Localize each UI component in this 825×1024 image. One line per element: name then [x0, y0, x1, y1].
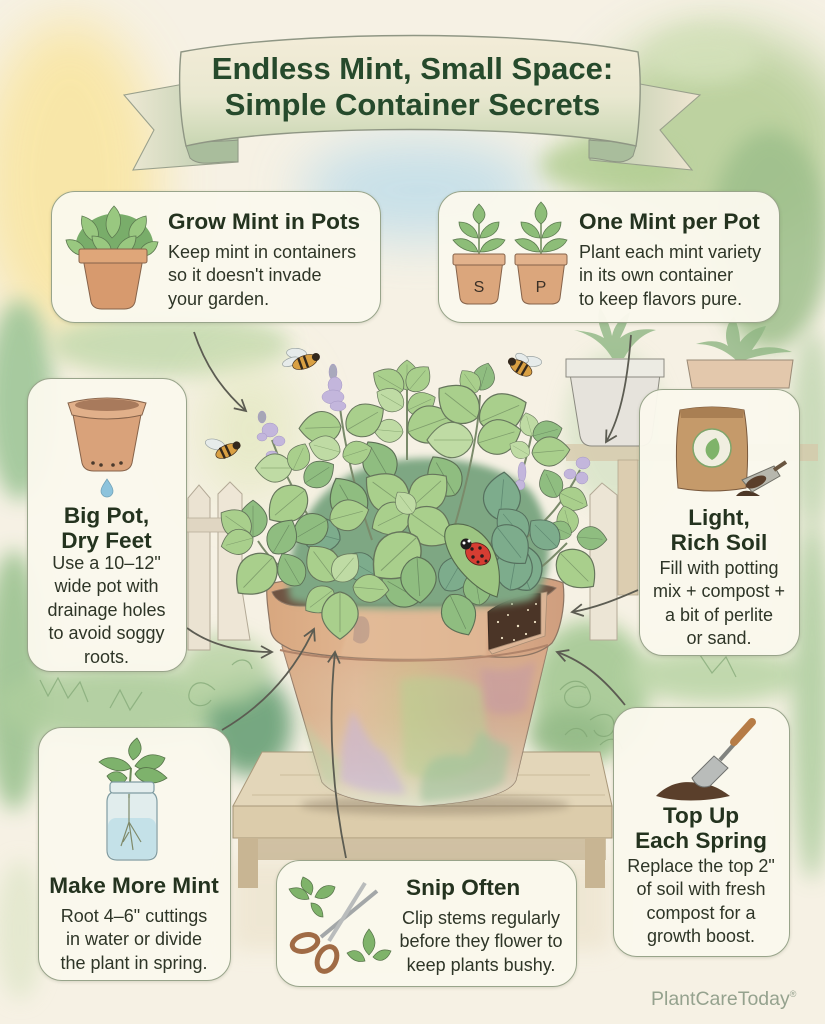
text: Plant each mint variety: [579, 242, 761, 262]
text: Keep mint in containers: [168, 242, 356, 262]
watermark: ®: [790, 989, 797, 999]
title: Simple Container Secrets: [225, 87, 600, 122]
heading: [635, 803, 767, 853]
heading: Rich Soil: [671, 530, 767, 555]
text: or sand.: [686, 628, 752, 648]
text: in its own container: [579, 265, 733, 285]
watermark: PlantCareToday: [651, 988, 790, 1010]
icon: two labelled pots: P: [536, 279, 546, 296]
stems: [258, 365, 580, 580]
text: the plant in spring.: [60, 953, 208, 973]
text: [399, 908, 563, 975]
panel: grow mint in pots: [51, 191, 381, 323]
text: [47, 553, 166, 667]
icon: trowel with soil: [656, 718, 756, 800]
title: [212, 51, 613, 122]
title ribbon: [124, 36, 700, 170]
bees: [201, 338, 546, 464]
text: of soil with fresh: [636, 879, 766, 899]
ladybird leaf: [445, 524, 499, 597]
heading: Grow Mint in Pots: [168, 209, 360, 234]
heading: Dry Feet: [61, 528, 152, 553]
text: Clip stems regularly: [402, 908, 560, 928]
text: [653, 558, 785, 648]
arrows: [187, 332, 638, 858]
front-left cluster: [352, 573, 390, 604]
ladybird: [460, 538, 495, 570]
wooden table: [233, 752, 612, 888]
text: to keep flavors pure.: [579, 289, 742, 309]
panel: light, rich soil: [639, 389, 800, 656]
wooden fence: [186, 482, 617, 650]
text: wide pot with: [54, 576, 159, 596]
right ribbon tail: [590, 84, 700, 170]
text: growth boost.: [647, 926, 755, 946]
text: keep plants bushy.: [407, 955, 555, 975]
pot rim: [267, 573, 564, 659]
panel: big pot, dry feet: [27, 378, 187, 672]
text: [579, 242, 762, 309]
text: in water or divide: [66, 929, 202, 949]
panel: top up each spring: [613, 707, 790, 957]
text: [60, 906, 208, 973]
text: a bit of perlite: [665, 605, 773, 625]
centre cluster: [355, 462, 418, 523]
text: Root 4–6" cuttings: [61, 906, 207, 926]
icon: scissors and sprigs: [288, 876, 392, 974]
heading: Light,: [688, 505, 750, 530]
top sprig leaves: [395, 360, 419, 390]
text: [627, 856, 775, 946]
far-left sprig: [239, 500, 267, 537]
text: so it doesn't invade: [168, 265, 322, 285]
text: to avoid soggy: [48, 623, 165, 643]
pot body: [282, 646, 548, 806]
heading: Snip Often: [406, 875, 520, 900]
text: roots.: [84, 647, 129, 667]
left ribbon tail: [124, 84, 238, 170]
mint plant: [213, 360, 608, 642]
flower spikes: [257, 364, 590, 490]
text: before they flower to: [399, 931, 563, 951]
plant backing: [288, 458, 549, 609]
text: Fill with potting: [659, 558, 779, 578]
heading: Each Spring: [635, 828, 767, 853]
heading: Make More Mint: [49, 873, 219, 898]
panel: snip often: [276, 860, 577, 987]
icon: pot with drainage holes: [67, 398, 147, 498]
heading: Top Up: [663, 803, 739, 828]
right sprig leaves: [470, 360, 498, 393]
icon: two labelled pots: [452, 202, 568, 304]
soil cutaway: [488, 592, 547, 654]
text: compost for a: [646, 903, 756, 923]
heading: One Mint per Pot: [579, 209, 760, 234]
heading: [61, 503, 152, 553]
background foliage strokes: [40, 655, 736, 749]
text: [168, 242, 356, 309]
text: Replace the top 2": [627, 856, 775, 876]
far-right sprig: [534, 465, 567, 502]
text: Use a 10–12": [52, 553, 161, 573]
panel: make more mint: [38, 727, 231, 981]
heading: Big Pot,: [64, 503, 149, 528]
panel: one mint per pot: [438, 191, 780, 323]
title: Endless Mint, Small Space:: [212, 51, 613, 86]
icon: jar with cutting: [98, 738, 168, 861]
small background pots: [566, 308, 793, 446]
text: mix + compost +: [653, 581, 785, 601]
wooden side table, right: [566, 444, 818, 595]
ribbon front: [180, 36, 640, 146]
third sprig leaves: [517, 410, 541, 438]
rear leaves: [482, 471, 523, 522]
text: drainage holes: [47, 600, 166, 620]
icon: mint in pot: [66, 206, 158, 310]
icon: two labelled pots: S: [474, 279, 484, 296]
terracotta pot: [267, 573, 564, 806]
flower stem leaves: [298, 411, 342, 445]
text: your garden.: [168, 289, 269, 309]
icon: soil bag and scoop: [676, 406, 788, 496]
heading: [671, 505, 767, 555]
